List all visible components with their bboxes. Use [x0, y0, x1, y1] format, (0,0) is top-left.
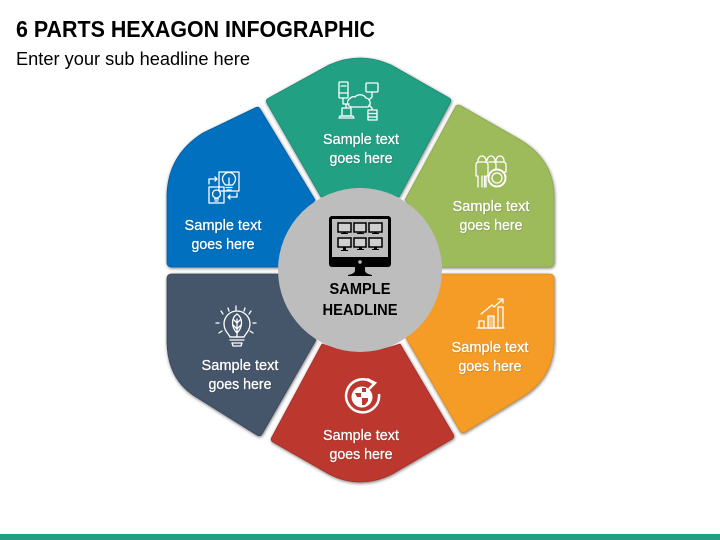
text: orange: goes here	[458, 359, 522, 375]
panel: teal segment	[266, 58, 451, 197]
bottom bar	[0, 534, 720, 540]
icon: idea bulbs	[209, 172, 239, 203]
headline: HEADLINE	[322, 302, 398, 319]
panel: green segment	[405, 105, 554, 267]
text: blue: goes here	[192, 237, 254, 253]
panel: centre circle	[278, 188, 442, 352]
icon: team and gear	[476, 156, 506, 187]
icon: network cloud	[339, 82, 378, 120]
subtitle: Enter your sub headline here	[16, 49, 250, 69]
text: red: Sample text	[323, 428, 399, 444]
panel: red segment	[271, 344, 454, 482]
icon: monitor with screens	[329, 216, 391, 276]
icon: globe refresh	[346, 379, 379, 412]
text: blue	[184, 218, 262, 253]
headline	[322, 281, 398, 319]
text: green: goes here	[460, 218, 522, 234]
text: teal: goes here	[330, 151, 392, 167]
text: orange	[452, 340, 528, 375]
headline: SAMPLE	[330, 281, 391, 298]
panel: blue segment	[167, 107, 315, 267]
text: navy: goes here	[208, 377, 272, 393]
text: red	[323, 428, 399, 463]
text: green	[452, 199, 530, 234]
text: teal: Sample text	[323, 132, 399, 148]
text: navy: Sample text	[202, 358, 278, 374]
text: orange: Sample text	[452, 340, 528, 356]
text: teal	[323, 132, 399, 167]
icon: eco bulb	[216, 306, 256, 346]
panel: navy segment	[167, 274, 316, 436]
text: blue: Sample text	[184, 218, 262, 234]
panel: orange segment	[406, 274, 554, 433]
text: navy	[202, 358, 278, 393]
text: green: Sample text	[452, 199, 530, 215]
title: 6 PARTS HEXAGON INFOGRAPHIC	[16, 16, 375, 42]
icon: growth chart	[477, 299, 504, 328]
text: red: goes here	[330, 447, 392, 463]
